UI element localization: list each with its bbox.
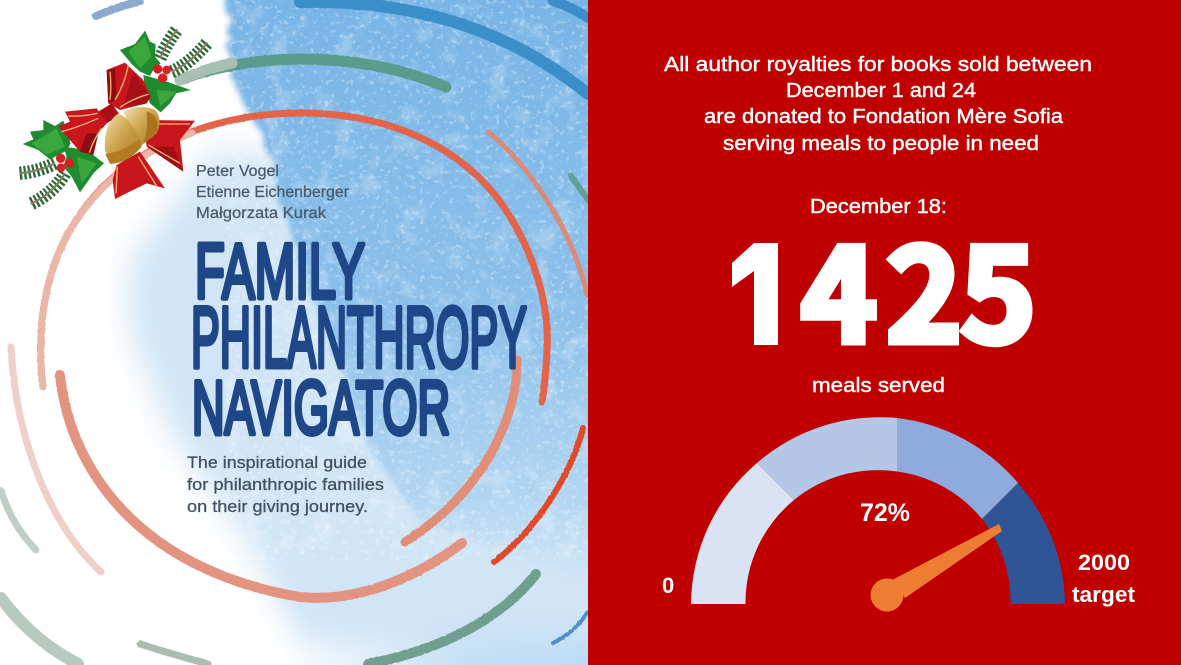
swirl brush strokes <box>1 1 588 664</box>
stroke: left pale green <box>1 491 36 550</box>
stroke: right small green <box>571 176 588 200</box>
gauge segment 4 <box>982 483 1065 604</box>
stroke: bottom small green <box>140 644 208 664</box>
meals served label: meals served <box>812 374 945 397</box>
stroke: main red ring top <box>41 113 547 402</box>
authors <box>196 163 349 222</box>
tagline: The inspirational guide <box>187 453 367 472</box>
big number: 1425 <box>727 193 1036 380</box>
gauge chart <box>691 417 1065 612</box>
ribbon tails <box>143 120 195 172</box>
stroke: top green arc <box>180 59 446 87</box>
max label: 2000 <box>1078 550 1130 575</box>
stroke: top blue arc <box>300 2 588 94</box>
date label: December 18: <box>810 195 947 218</box>
icon: christmas bow, bells and holly <box>19 29 207 204</box>
donation statement: serving meals to people in need <box>723 132 1039 155</box>
gauge segment 2 <box>757 417 897 500</box>
stroke: right salmon arc <box>405 360 517 542</box>
stroke: bottom salmon ring <box>60 375 462 598</box>
bells <box>123 107 160 147</box>
donation statement: are donated to Fondation Mère Sofia <box>704 105 1064 128</box>
holly highlights <box>32 37 177 183</box>
berries <box>56 64 171 172</box>
ribbon trim <box>62 65 190 193</box>
donation statement <box>664 53 1092 155</box>
stroke: bottom-right green <box>368 574 536 664</box>
pine twigs <box>19 29 207 204</box>
percent label: 72% <box>860 499 910 527</box>
stroke: outer salmon arc <box>488 132 587 295</box>
authors: Peter Vogel <box>196 163 279 180</box>
donation statement: December 1 and 24 <box>786 79 976 102</box>
title: PHILANTHROPY <box>191 290 527 386</box>
authors: Etienne Eichenberger <box>196 184 349 201</box>
tagline: on their giving journey. <box>187 497 368 516</box>
panel: book cover <box>0 0 620 665</box>
watercolor background <box>130 0 620 665</box>
ribbon shading <box>80 68 183 172</box>
tagline <box>187 453 384 516</box>
title <box>193 242 528 437</box>
ribbon loops <box>107 63 151 110</box>
stroke: lower-right blue <box>553 613 587 643</box>
gauge segment 1 <box>691 463 794 604</box>
min label: 0 <box>662 573 674 598</box>
gauge needle <box>870 524 1002 612</box>
gauge segment 3 <box>897 418 1018 519</box>
authors: Małgorzata Kurak <box>196 205 326 222</box>
stroke: far-left pale salmon <box>11 347 101 572</box>
stroke: top right blue arc <box>553 1 588 18</box>
holly leaves <box>23 31 191 192</box>
title: NAVIGATOR <box>192 366 450 451</box>
tagline: for philanthropic families <box>187 475 384 494</box>
stroke: bottom-left green <box>1 598 78 664</box>
title: FAMILY <box>195 227 365 315</box>
stroke: top-left blue <box>96 1 140 16</box>
target label: target <box>1072 582 1136 607</box>
donation statement: All author royalties for books sold between <box>664 53 1092 76</box>
panel: donation info <box>588 0 1181 665</box>
stroke: lower red arc <box>494 428 583 562</box>
